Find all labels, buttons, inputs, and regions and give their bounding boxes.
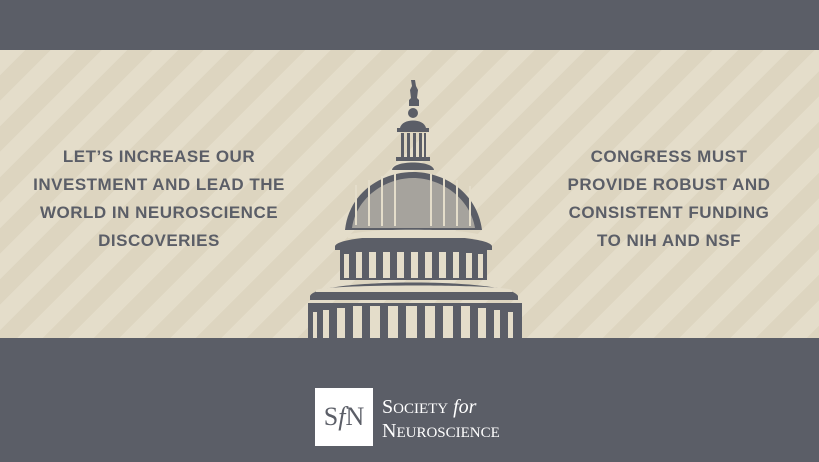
panel: beige striped band [0, 50, 819, 338]
text block: left message: LET’S INCREASE OUR [63, 147, 255, 166]
text block: left message: WORLD IN NEUROSCIENCE [40, 203, 278, 222]
logo mark box [315, 388, 373, 446]
text block: left message: INVESTMENT AND LEAD THE [33, 175, 285, 194]
logo wordmark [382, 396, 500, 442]
text block: right message: CONGRESS MUST [591, 147, 747, 166]
text block: right message: PROVIDE ROBUST AND [568, 175, 770, 194]
logo wordmark: SOCIETY for [382, 396, 476, 418]
logo: SfN [315, 388, 500, 446]
text block: right message [568, 147, 770, 250]
text block: right message: CONSISTENT FUNDING [569, 203, 769, 222]
text block: left message [33, 147, 285, 250]
text block: left message: DISCOVERIES [98, 231, 220, 250]
logo wordmark: NEUROSCIENCE [382, 420, 500, 442]
logo mark box: SfN [324, 402, 364, 431]
text block: right message: TO NIH AND NSF [597, 231, 741, 250]
